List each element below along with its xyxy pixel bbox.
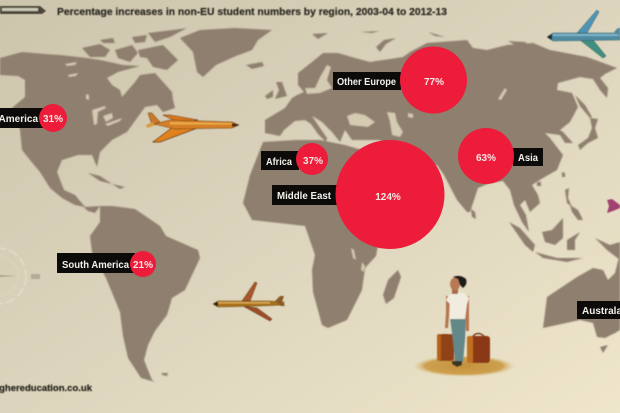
title: Percentage increases in non-EU student numbers by region, 2003-04 to 2012-13 [57, 6, 447, 18]
map: Central America [78, 202, 100, 213]
left suitcase [437, 332, 454, 361]
map: Australia [543, 253, 620, 338]
region: Asia: Asia [518, 153, 538, 164]
map: Greenland [180, 28, 272, 77]
water: Great Lakes [92, 106, 106, 125]
map: North America [0, 52, 175, 207]
region: Middle East: 124% [375, 192, 401, 203]
map: Hainan [537, 182, 541, 186]
map: Iceland [246, 62, 264, 69]
region: North America: 31% [43, 114, 63, 125]
map: Philippines [565, 188, 572, 207]
region: Asia [458, 128, 543, 184]
map: Japan [578, 118, 598, 150]
region: Africa [261, 143, 328, 175]
legs [450, 318, 466, 362]
region: Other Europe: 77% [424, 77, 444, 88]
plane: blue, top right [547, 10, 620, 58]
map: British Isles [275, 82, 287, 99]
region: Other Europe [333, 46, 467, 114]
plane: orange, Atlantic [146, 113, 239, 142]
man with suitcases [412, 276, 516, 377]
map: Sulawesi [567, 232, 580, 250]
compass rose [0, 248, 40, 304]
region: Middle East [272, 140, 444, 249]
ground shadow [412, 355, 516, 377]
region: Middle East: Middle East [277, 191, 332, 202]
map: Arctic islands [82, 44, 110, 57]
inland water and seas [65, 62, 507, 272]
shoes [452, 361, 462, 367]
map: Tasmania [600, 345, 608, 353]
hair [453, 276, 467, 288]
map: New Guinea [595, 238, 620, 260]
shirt [446, 292, 469, 319]
map: Java and Lesser Sunda [535, 252, 583, 262]
region: Australasia [577, 301, 620, 319]
map: Sumatra [509, 222, 535, 252]
map: Sri Lanka [471, 209, 476, 219]
head [450, 278, 460, 290]
map: Eurasia [265, 40, 617, 232]
water: Black Sea [347, 113, 375, 127]
region: South America: 21% [133, 260, 153, 271]
map: Falkland Islands [162, 373, 168, 376]
data bubbles and labels [0, 46, 620, 319]
water: African lakes [351, 248, 356, 260]
arms [445, 296, 450, 328]
water: Canadian lakes [65, 62, 77, 66]
map: New Siberian Islands [508, 41, 530, 46]
plane: pink, right edge [607, 199, 620, 213]
map: Sakhalin [575, 95, 592, 118]
plane: brown, south Atlantic [213, 282, 285, 321]
right suitcase [467, 334, 490, 363]
neck [452, 289, 458, 294]
region: Africa: 37% [303, 156, 323, 167]
region: Asia: 63% [476, 153, 496, 164]
map: Madagascar [383, 270, 401, 304]
water: Aral Sea [408, 113, 413, 118]
logo [0, 6, 46, 14]
region: South America [57, 251, 156, 277]
map: Novaya Zemlya [376, 38, 396, 52]
water: Lake Baikal [498, 88, 507, 100]
water: Baltic Sea [305, 65, 332, 94]
water: Caspian Sea [387, 112, 403, 137]
region: Other Europe: Other Europe [337, 77, 396, 88]
map: Svalbard and Arctic islets [312, 33, 328, 39]
region: North America [0, 104, 67, 132]
map: Taiwan [562, 172, 565, 177]
region: Africa: Africa [266, 157, 292, 168]
region: South America: South America [62, 260, 129, 271]
map: Africa and Arabia [243, 140, 410, 328]
map: Caribbean [88, 173, 112, 184]
map: South America [90, 206, 200, 382]
map: Borneo [542, 218, 563, 245]
